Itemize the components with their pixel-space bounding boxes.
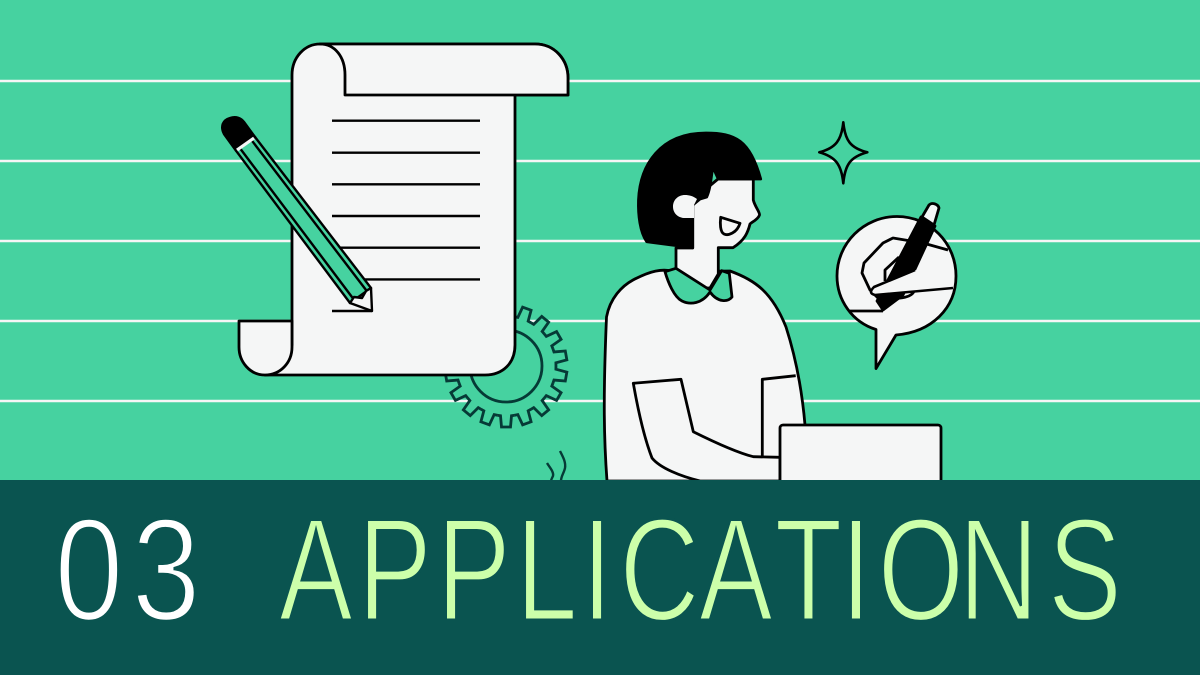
title band [0,480,1200,675]
paper and hand [850,310,883,312]
ear [673,195,697,218]
icon: sparkle star [819,122,867,183]
collar [665,268,732,303]
bubble [837,216,956,368]
laptop [780,425,941,483]
icon: gear [444,305,568,427]
icon: steam squiggles [547,451,565,481]
smile [720,217,740,235]
left arm [633,379,780,481]
person body [604,270,805,481]
thumb [871,270,953,295]
hair [638,133,761,248]
neck and face [676,179,760,288]
pen [877,217,935,310]
section number: 03 [54,487,201,651]
title: APPLICATIONS [279,489,1122,652]
icon: speech bubble with writing hand [837,204,956,368]
illustration: person at laptop [604,133,941,483]
icon: pencil [222,117,372,311]
icon: paper scroll [239,44,568,375]
